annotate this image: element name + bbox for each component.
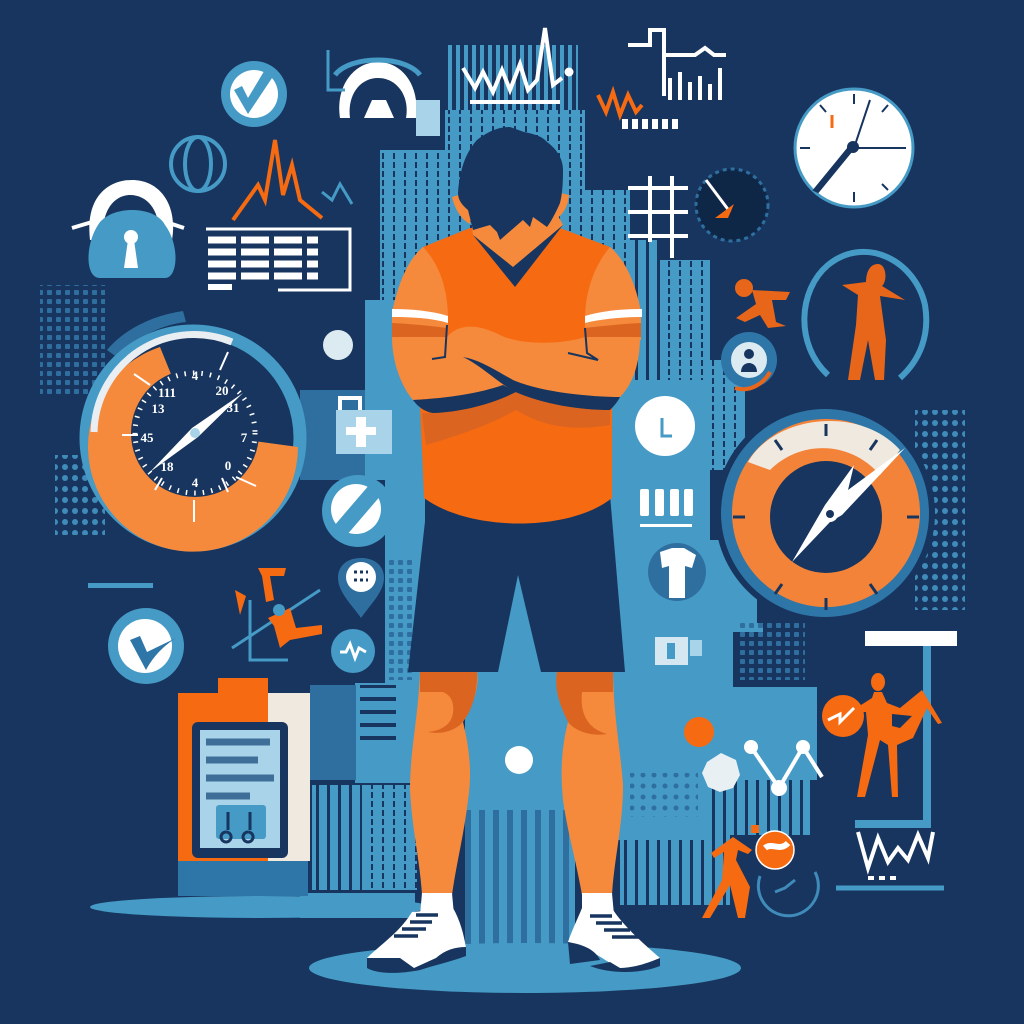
gauge numbers: 45 [140,430,154,445]
left shoe [367,907,466,973]
small dark gauge [696,169,768,241]
small orange spark chart [598,92,680,124]
right sock [582,893,614,915]
orange dot marker [684,717,714,747]
orange walking figure [702,825,759,918]
gauge numbers: 0 [225,458,231,473]
shirt torso [392,228,640,524]
gauge with orange figure [804,252,926,380]
gauge numbers: 18 [160,459,174,474]
ground shadow left [90,896,430,918]
ears [452,190,569,224]
top gauge icon [328,50,440,136]
gauge dial [131,369,259,497]
athlete figure [367,127,660,973]
bar capsules [640,489,693,527]
blue ring with tick [758,872,818,916]
needle hub [190,428,200,438]
right sleeve [585,247,641,340]
crossed arms [392,327,640,403]
gauge long ticks [122,352,256,522]
left leg [410,672,478,895]
small tag icon [655,637,702,665]
location pin icon [338,558,384,618]
shirt badge [648,543,706,601]
gauge numbers: 20 [216,383,228,398]
gauge numbers: 13 [152,401,165,416]
gauge ticks [135,373,255,493]
blue ring [86,331,300,545]
data table panel [206,229,350,290]
white octagon [702,753,740,792]
gauge numbers: 4 [192,475,199,490]
sleeve bands [392,309,448,323]
face and neck [470,210,563,267]
left sleeve [392,247,448,340]
gauge numbers: 31 [226,400,240,415]
large left gauge [86,311,300,552]
sleeve dark stripes [392,323,641,337]
orange gauge band [88,347,298,552]
hash grid icon [628,176,688,258]
bottom right pulse chart [836,832,944,888]
right leg [556,672,623,895]
orange chat badge [756,831,794,869]
white ball marker [505,746,533,774]
top right bar chart [628,30,726,100]
check circle badge [108,608,184,684]
bracket line [855,646,927,824]
clipboard device [178,678,310,896]
large right gauge [715,403,935,623]
ground shadow under athlete [309,943,741,993]
top check badge [221,61,287,127]
gauge needle [150,393,243,472]
left sock [420,893,454,915]
orange running icon [735,279,790,328]
lower shirt shade [422,392,610,445]
top right white clock [795,89,913,207]
right shoe [568,908,660,972]
left knee shading [420,672,477,733]
pulse badge [331,629,375,673]
dash label [88,583,153,588]
orange tools diagram [232,568,322,660]
right forearm band [463,357,620,410]
prohibition badge [322,475,394,547]
left forearm band [413,385,516,413]
small white circle [323,330,353,360]
gauge numbers [140,368,248,490]
background data skyline [40,45,965,950]
person badge [721,332,777,389]
white wear band [94,334,232,432]
gauge numbers: 111 [158,385,176,400]
white header bar [865,631,957,646]
line chart [746,742,822,794]
padlock icon [72,180,184,278]
arm crease lines [432,325,598,360]
outer arc fragment [107,311,186,358]
shorts [408,495,625,672]
brain outline icon [171,137,225,191]
orange partner exercise figures [850,673,942,797]
top heart-rate chart [463,28,572,102]
gauge numbers: 4 [192,368,199,383]
hair [458,127,563,240]
medical case icon [336,398,392,454]
gauge numbers: 7 [241,430,248,445]
white clock circle [635,396,695,456]
orange check badge [822,695,864,737]
collar [473,225,563,287]
orange pulse chart [233,140,352,220]
right knee shading [556,672,613,735]
